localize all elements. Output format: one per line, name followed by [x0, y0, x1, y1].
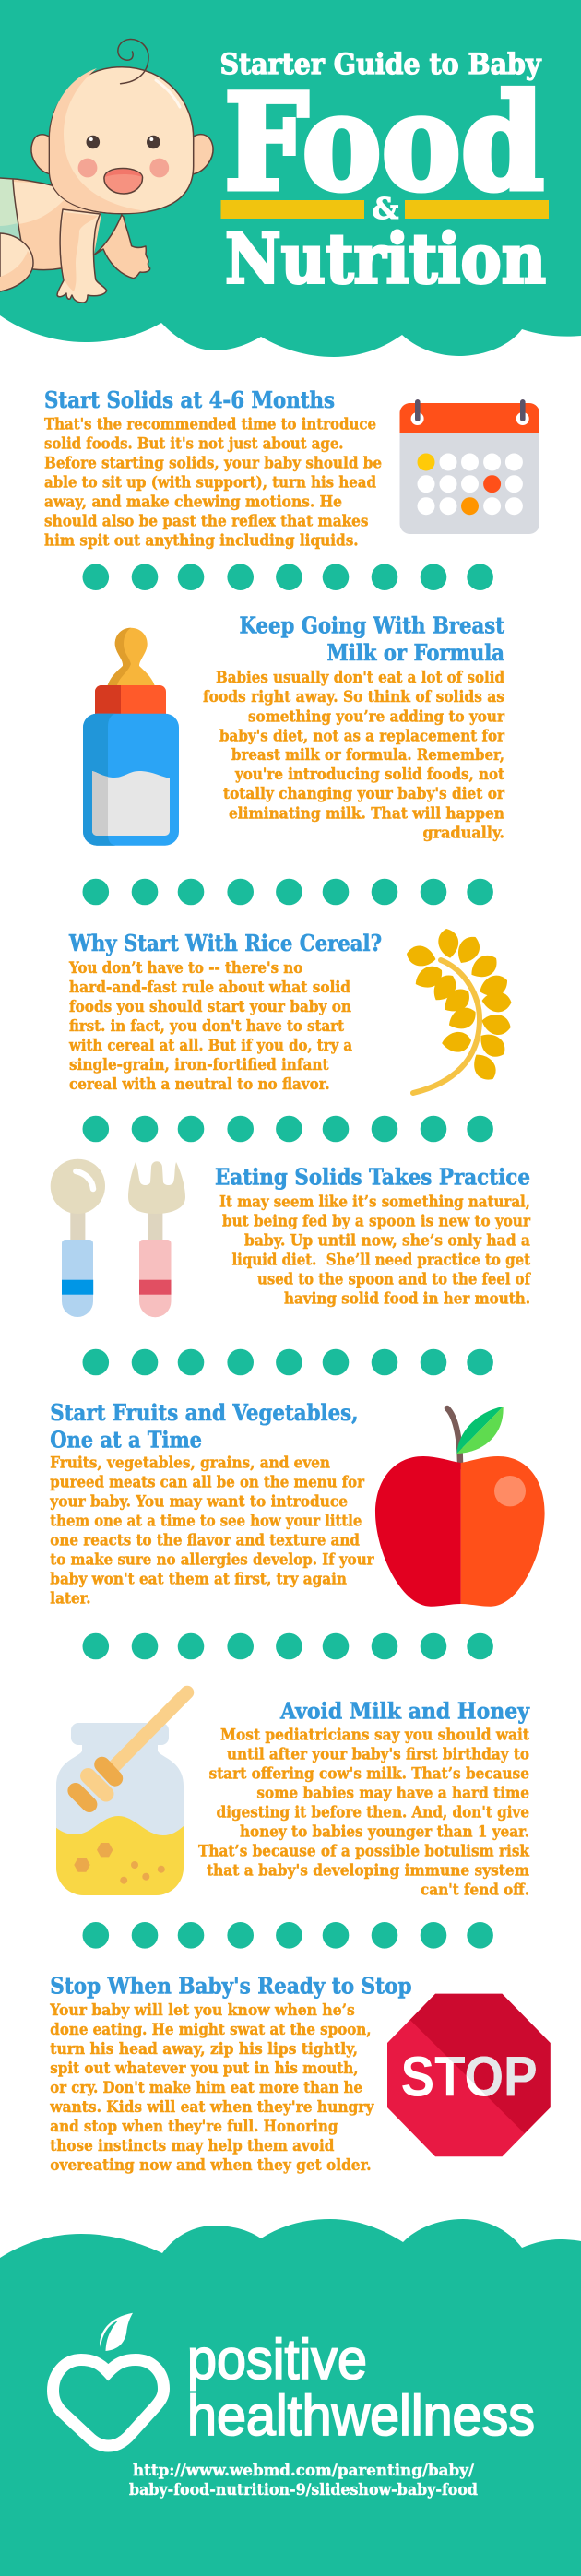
icon: apple heart [53, 2313, 164, 2446]
body text: can't fend off. [421, 1882, 529, 1900]
body text: That's the recommended time to introduce [44, 416, 376, 434]
body text: them one at a time to see how your little [50, 1513, 362, 1531]
icon: calendar [400, 399, 540, 534]
panel: stop when baby's ready to stop [49, 1973, 551, 2175]
body text: eliminating milk. That will happen [229, 804, 504, 823]
title line: nutrition: Nutrition [225, 220, 546, 299]
dotted divider 2 [83, 879, 493, 905]
body text: Your baby will let you know when he’s [49, 2001, 355, 2020]
body text: you're introducing solid foods, not [234, 766, 504, 784]
panel: start solids at 4-6 months [44, 386, 540, 551]
header banner with scalloped edge [0, 0, 581, 357]
body text: foods right away. So think of solids as [203, 688, 504, 706]
wordmark [187, 2328, 535, 2447]
body text: with cereal at all. But if you do, try a [68, 1037, 352, 1055]
body text: one reacts to the flavor and texture and [50, 1532, 360, 1550]
icon: stop sign: STOP [401, 2045, 538, 2107]
body text: able to sit up (with support), turn his head [44, 474, 376, 493]
body text: something you’re adding to your [248, 707, 505, 726]
body text: liquid diet. She’ll need practice to get [232, 1251, 530, 1269]
logo: positive healthwellness [53, 2313, 535, 2447]
body text: hard-and-fast rule about what solid [69, 979, 350, 997]
dotted divider 6 [83, 1922, 493, 1949]
heading [50, 1399, 359, 1453]
dotted divider 5 [83, 1633, 493, 1659]
body text [198, 1727, 530, 1900]
body text: should also be past the reflex that makes [44, 513, 369, 531]
icon: crawling baby [0, 39, 213, 303]
body text: start offering cow's milk. That’s because [209, 1765, 529, 1784]
body text: later. [50, 1590, 91, 1609]
yellow rule left [221, 200, 364, 219]
dotted divider 4 [83, 1349, 493, 1375]
icon: apple [375, 1407, 545, 1607]
wordmark: healthwellness [187, 2384, 535, 2447]
body text [68, 959, 352, 1094]
heading: Start Solids at 4-6 Months [44, 386, 335, 413]
panel: avoid milk and honey [56, 1692, 530, 1900]
panel: eating solids takes practice [51, 1159, 531, 1317]
icon: stop sign: STOP [401, 2045, 538, 2107]
body text [44, 416, 382, 551]
body text: to make sure no allergies develop. If your [50, 1551, 375, 1570]
body text: solid foods. But it's not just about age. [44, 435, 343, 454]
panel: keep going with breast milk or formula [83, 612, 505, 846]
body text: some babies may have a hard time [256, 1785, 529, 1803]
body text: It may seem like it’s something natural, [219, 1193, 530, 1211]
body text: baby. Up until now, she’s only had a [244, 1231, 530, 1250]
source url: baby-food-nutrition-9/slideshow-baby-food [129, 2481, 478, 2499]
body text: wants. Kids will eat when they're hungry [49, 2098, 374, 2117]
body text: gradually. [422, 824, 504, 842]
heading: One at a Time [50, 1426, 202, 1453]
icon: honey jar with dipper [56, 1692, 187, 1895]
panel: why start with rice cereal [68, 928, 513, 1094]
icon: wheat sprig [405, 928, 513, 1093]
source url: http://www.webmd.com/parenting/baby/ [133, 2462, 475, 2480]
title [219, 48, 549, 299]
body text: baby won't eat them at first, try again [50, 1571, 347, 1589]
body text: used to the spoon and to the feel of [257, 1270, 531, 1288]
body text: Babies usually don't eat a lot of solid [216, 669, 504, 687]
body text: digesting it before then. And, don't give [217, 1804, 529, 1822]
heading: Keep Going With Breast [240, 612, 505, 639]
heading: Start Fruits and Vegetables, [50, 1399, 359, 1426]
body text: those instincts may help them avoid [50, 2137, 335, 2155]
ampersand: & [373, 191, 399, 226]
heading: Why Start With Rice Cereal? [68, 930, 382, 956]
body text: your baby. You may want to introduce [49, 1493, 348, 1512]
body text: honey to babies younger than 1 year. [240, 1823, 529, 1842]
source url [129, 2462, 478, 2499]
wordmark: positive [187, 2328, 367, 2391]
body text: baby's diet, not as a replacement for [219, 727, 505, 745]
body text [203, 669, 505, 842]
body text: but being fed by a spoon is new to your [222, 1212, 531, 1230]
yellow rule right [405, 200, 549, 219]
dotted divider 3 [83, 1116, 493, 1142]
body text [219, 1193, 531, 1308]
icon: baby fork [128, 1161, 185, 1317]
heading: Avoid Milk and Honey [279, 1697, 530, 1724]
body text: breast milk or formula. Remember, [231, 746, 504, 765]
heading [240, 612, 505, 666]
body text: That’s because of a possible botulism risk [198, 1843, 530, 1861]
body text: him spit out anything including liquids. [44, 532, 359, 551]
body text: that a baby's developing immune system [207, 1862, 529, 1881]
heading: Stop When Baby's Ready to Stop [50, 1973, 412, 2000]
body text: foods you should start your baby on [69, 998, 351, 1016]
body text: You don’t have to -- there's no [68, 959, 302, 978]
body text: Most pediatricians say you should wait [220, 1727, 529, 1745]
icon: baby bottle [83, 628, 179, 846]
dotted divider 1 [83, 564, 493, 590]
body text: until after your baby's first birthday to [227, 1746, 529, 1764]
footer banner with scalloped edge [0, 2219, 581, 2576]
icon: baby spoon [51, 1159, 105, 1317]
body text: first. in fact, you don't have to start [69, 1017, 344, 1036]
body text: pureed meats can all be on the menu for [50, 1474, 365, 1492]
body text: having solid food in her mouth. [284, 1289, 530, 1308]
title line: starter guide: Starter Guide to Baby [219, 48, 541, 81]
body text [49, 2001, 374, 2175]
body text: Fruits, vegetables, grains, and even [50, 1454, 330, 1473]
title line: food: Food [224, 65, 544, 220]
body text: single-grain, iron-fortified infant [69, 1056, 329, 1074]
body text: totally changing your baby's diet or [223, 785, 505, 803]
body text: cereal with a neutral to no flavor. [69, 1075, 330, 1094]
body text: done eating. He might swat at the spoon, [50, 2021, 372, 2039]
body text [49, 1454, 375, 1609]
heading: Eating Solids Takes Practice [215, 1163, 530, 1190]
body text: turn his head away, zip his lips tightly, [50, 2040, 358, 2059]
body text: spit out whatever you put in his mouth, [50, 2060, 359, 2078]
heading: Milk or Formula [326, 639, 504, 666]
body text: or cry. Don't make him eat more than he [50, 2079, 362, 2097]
body text: overeating now and when they get older. [50, 2156, 372, 2175]
icon: stop sign [387, 1994, 551, 2156]
body text: away, and make chewing motions. He [44, 493, 342, 512]
body text: Before starting solids, your baby should be [44, 455, 382, 473]
panel: start fruits and vegetables [49, 1399, 545, 1609]
body text: and stop when they're full. Honoring [50, 2118, 338, 2136]
